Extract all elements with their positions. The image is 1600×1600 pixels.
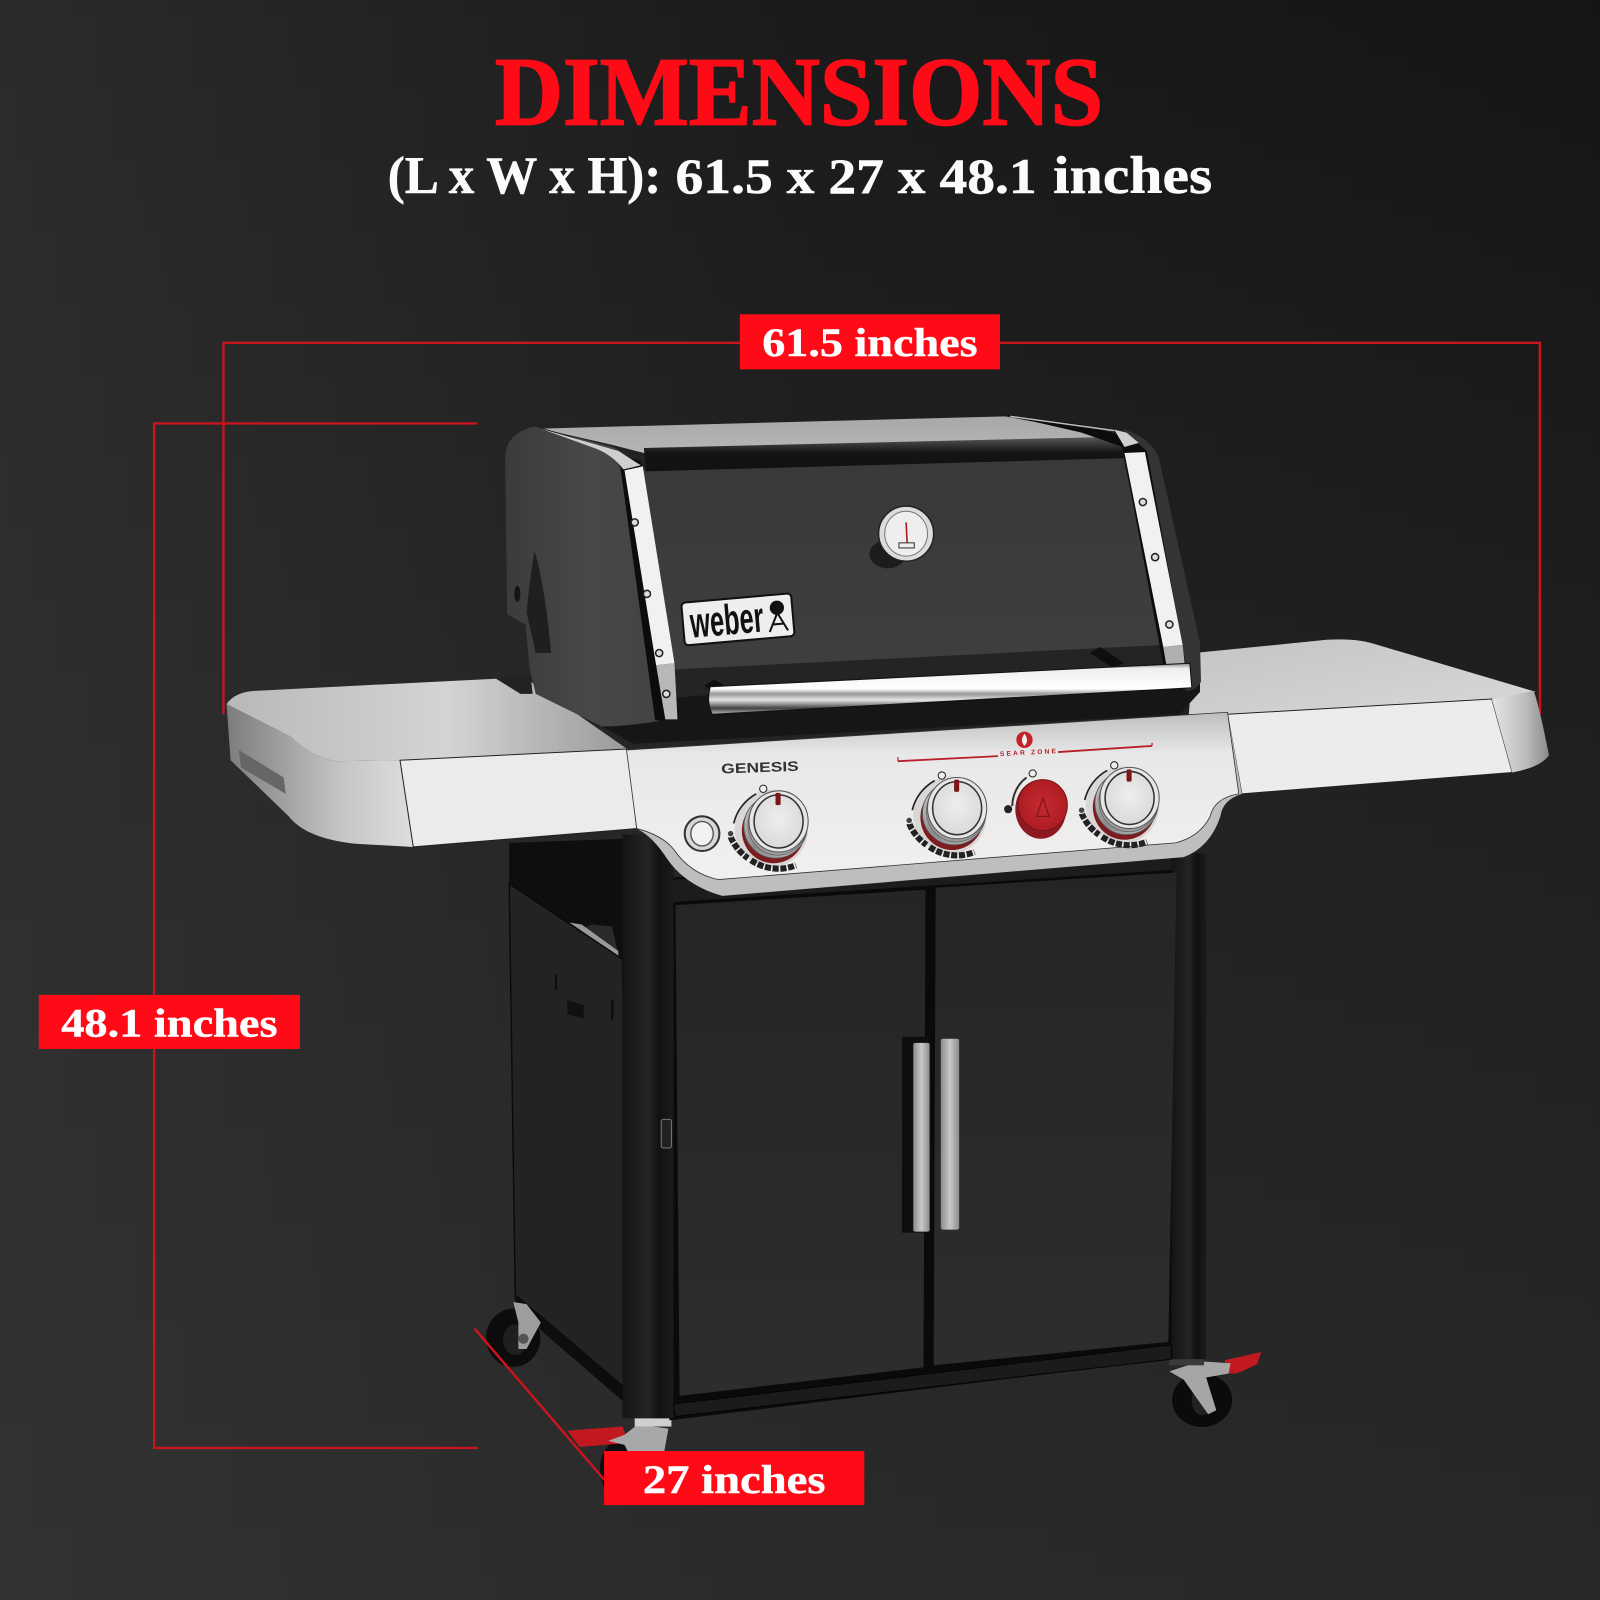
subtitle: overall dimensions: (L x W x H): [388,147,661,205]
hood top [541,416,1118,453]
burner knob 2 [906,772,987,855]
left side shelf [227,676,637,847]
dimension line: depth 27 inches [474,1329,604,1480]
label: 48.1 inches: 48.1 inches [61,1002,278,1046]
label: 61.5 inches: 61.5 inches [762,321,978,365]
burner knob 4 [1078,762,1159,845]
hood handle brackets [704,647,1124,698]
label: 61.5 inches [740,314,1000,369]
hood dark base [600,653,1200,744]
right side shelf [1189,639,1549,794]
right cabinet door [934,872,1177,1365]
door handles [902,1037,959,1233]
label: 27 inches: 27 inches [643,1458,826,1502]
grill illustration [227,414,1549,1500]
left cabinet door [676,890,926,1396]
dimension line: width 61.5 inches [223,343,1540,714]
caster: front left [567,1416,671,1500]
hood front face [644,458,1184,686]
sear zone marking: SEAR ZONE [1000,748,1057,758]
label: 27 inches [604,1451,864,1505]
burner knob 1 [727,785,808,869]
subtitle: overall dimensions: inches [1053,147,1212,205]
weber badge: weber [687,594,766,648]
hood handle [709,663,1192,714]
thermometer [869,506,934,568]
sear zone marking [898,732,1152,761]
brand label: Genesis: GENESIS [721,759,799,776]
sear zone knob [1004,770,1067,839]
left chrome strip [537,427,680,720]
cabinet frame and posts [622,835,1206,1420]
door hinge tag [661,1119,671,1148]
caster: front right [1169,1352,1261,1428]
control panel [627,712,1242,896]
title: DIMENSIONS [495,38,1103,146]
hood [505,414,1201,727]
dimension line: height 48.1 inches [154,423,478,1448]
caster: back left [486,1302,541,1367]
cart side panel [509,839,629,1406]
subtitle: overall dimensions [388,147,1212,205]
right chrome strip [1002,414,1186,665]
hood right cap [1122,429,1201,691]
subtitle: overall dimensions: 61.5 x 27 x 48.1 [676,148,1037,204]
ignition button [685,816,719,851]
hood left side [505,427,676,727]
label: 48.1 inches [39,995,300,1049]
